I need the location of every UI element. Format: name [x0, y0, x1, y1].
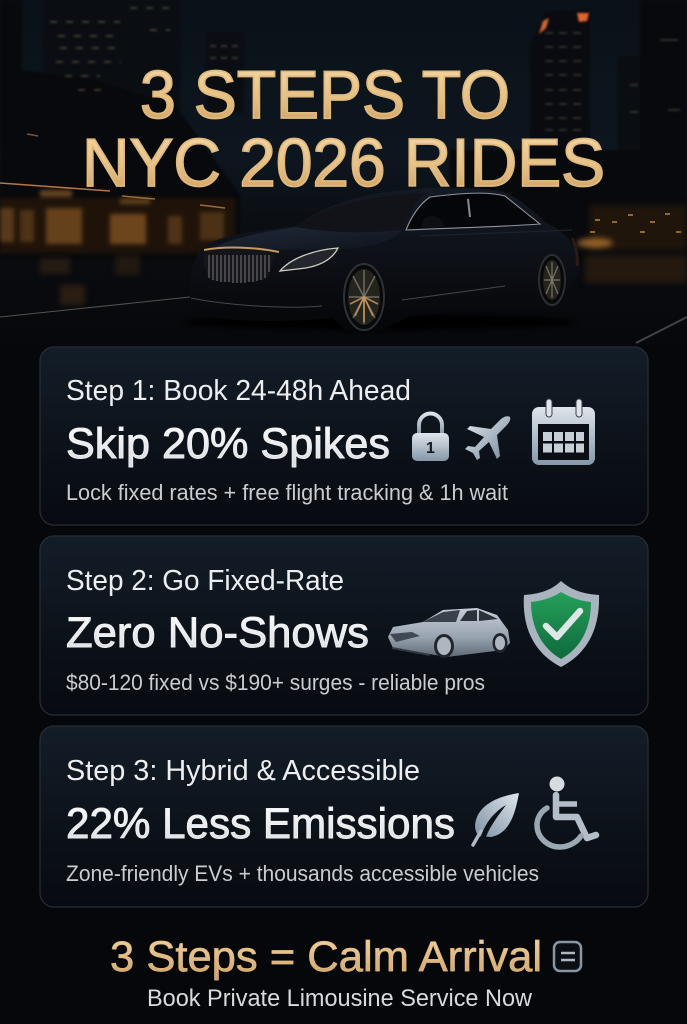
title: 3 STEPS TO: [140, 57, 510, 133]
panel: step 1: [40, 347, 648, 525]
front wheel: [344, 264, 384, 330]
call to action: Book Private Limousine Service Now: [147, 985, 533, 1012]
step 1 label: Step 1: Book 24-48h Ahead: [66, 375, 411, 407]
car body: [190, 188, 580, 330]
step 2 description: $80-120 fixed vs $190+ surges - reliable pros: [66, 670, 485, 695]
side windows: [406, 193, 540, 230]
footer: [110, 933, 581, 1012]
icon: padlock: 1: [426, 440, 435, 457]
step 3 label: Step 3: Hybrid & Accessible: [66, 755, 420, 787]
icon: airplane: [465, 416, 510, 460]
step 3 headline: 22% Less Emissions: [66, 800, 455, 848]
hood: [214, 227, 402, 250]
icon: silver car: [388, 608, 510, 658]
step 2 headline: Zero No-Shows: [66, 609, 369, 657]
icon: green shield with check: [524, 581, 599, 667]
icon: padlock: [412, 414, 449, 461]
body lines: [191, 286, 505, 307]
panel: step 2: [40, 536, 648, 715]
panel: step 3: [40, 726, 648, 907]
grille: [203, 248, 279, 283]
step 3 description: Zone-friendly EVs + thousands accessible vehicles: [66, 861, 539, 886]
hero limousine: [185, 188, 580, 330]
headlight: [280, 248, 338, 271]
icon: leaf: [473, 793, 519, 845]
icon: wheelchair accessibility: [537, 776, 596, 847]
step 1 headline: Skip 20% Spikes: [66, 420, 390, 468]
windshield: [296, 193, 424, 232]
step 1 description: Lock fixed rates + free flight tracking & 1h wait: [66, 480, 508, 505]
footer headline: 3 Steps = Calm Arrival: [110, 933, 542, 981]
title: [82, 57, 605, 201]
icon: calendar: [532, 399, 595, 465]
rear wheel: [539, 255, 565, 305]
step 2 label: Step 2: Go Fixed-Rate: [66, 565, 344, 597]
mirror: [421, 216, 445, 228]
title: NYC 2026 RIDES: [82, 125, 605, 201]
icon: menu square: [554, 942, 581, 971]
